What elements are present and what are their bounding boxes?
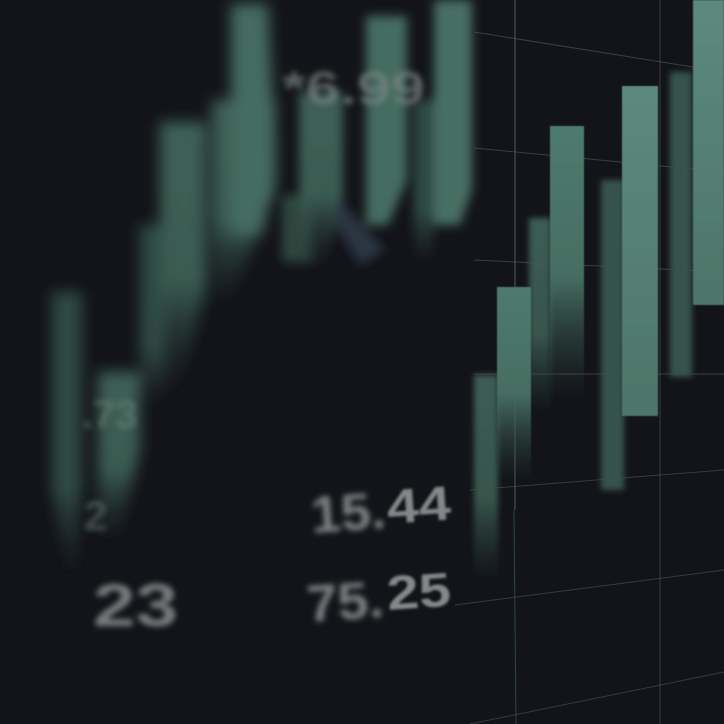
mid-distance bars (474, 72, 692, 580)
blurred number labels: .73 (82, 393, 138, 437)
blurred centre bars (282, 0, 472, 265)
blurred number labels: 25 (385, 564, 453, 621)
blurred number labels: 44 (385, 478, 453, 535)
blurred number labels: 23 (93, 572, 178, 639)
blurred number labels: 2 (84, 492, 107, 539)
blurred number labels: 15. (309, 482, 388, 545)
blurred number labels: *6.99 (282, 62, 425, 114)
blurred number labels (82, 62, 453, 639)
blurred left bars (52, 4, 276, 572)
grid lines (455, 0, 724, 724)
blurred number labels: 75. (305, 571, 386, 634)
sharp bars (497, 0, 724, 482)
